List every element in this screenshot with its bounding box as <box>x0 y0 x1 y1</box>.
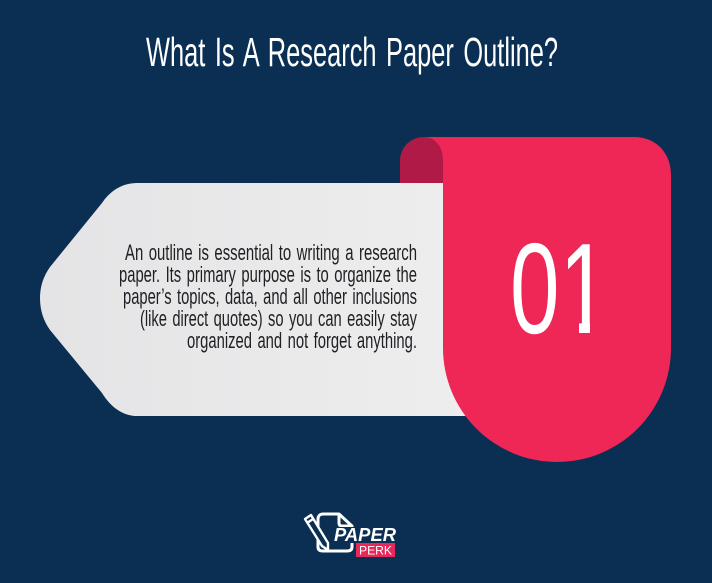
pink ribbon <box>424 137 671 462</box>
icon: document <box>318 514 352 551</box>
body text: organized and not forget anything. <box>187 328 417 353</box>
grey arrow panel <box>40 183 480 416</box>
body text: paper’s topics, data, and all other inclusions <box>123 284 417 309</box>
body text: (like direct quotes) so you can easily stay <box>140 306 417 331</box>
ribbon fold <box>400 137 443 190</box>
logo badge: perk: PERK <box>359 544 392 558</box>
body text: An outline is essential to writing a research <box>125 240 417 265</box>
logo backing <box>332 527 398 543</box>
body text: paper. Its primary purpose is to organize the <box>119 262 417 287</box>
body text <box>119 240 417 353</box>
logo word: paper: PAPER <box>334 525 396 545</box>
number 01: 01 <box>510 218 609 361</box>
logo: Paper Perk <box>305 514 398 558</box>
icon: pencil <box>305 515 328 550</box>
